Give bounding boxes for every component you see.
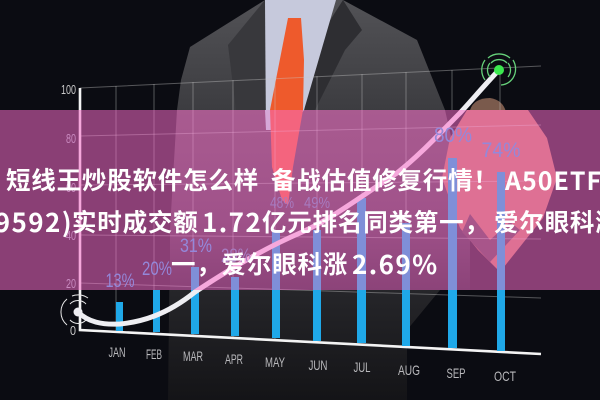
tie seen through band bbox=[270, 110, 303, 205]
y axis labels in band: 40 bbox=[66, 228, 76, 243]
percentage labels: 13% bbox=[106, 271, 135, 292]
bars bbox=[116, 158, 505, 351]
chart grid bbox=[80, 66, 541, 350]
percentage labels: 48% bbox=[270, 195, 294, 212]
month labels: FEB bbox=[146, 346, 162, 362]
y axis labels in band: 60 bbox=[66, 180, 76, 195]
green target marker bbox=[482, 54, 516, 85]
y axis labels: 0 bbox=[70, 323, 76, 338]
month labels: JUL bbox=[354, 359, 371, 375]
month labels: MAR bbox=[183, 348, 203, 364]
start target marker bbox=[61, 295, 88, 325]
month labels: SEP bbox=[446, 365, 466, 381]
y axis labels in band: 80 bbox=[66, 131, 76, 146]
percentage labels: 28% bbox=[221, 246, 251, 267]
month labels: AUG bbox=[398, 362, 420, 378]
growth curve bbox=[78, 72, 497, 324]
businessman figure bbox=[168, 0, 506, 400]
y axis in band bbox=[78, 110, 82, 290]
title line 2 bbox=[0, 203, 600, 240]
grid in band bbox=[80, 110, 541, 298]
title line 2: 1.72 bbox=[202, 203, 262, 240]
hand seen through band bbox=[442, 110, 557, 272]
month labels: MAY bbox=[265, 354, 285, 370]
title line 2: 实时成交额 bbox=[72, 204, 198, 239]
percentage labels: 31% bbox=[180, 236, 212, 257]
title line 1: A50ETF bbox=[505, 162, 600, 198]
axes bbox=[80, 88, 541, 354]
shirt seen through band bbox=[265, 110, 304, 130]
title line 3 bbox=[171, 245, 439, 282]
month labels: OCT bbox=[494, 368, 516, 384]
month labels: JAN bbox=[108, 344, 126, 360]
y axis labels bbox=[61, 82, 76, 338]
title line 3: 一，爱尔眼科涨 bbox=[171, 246, 348, 281]
title line 1 bbox=[6, 162, 600, 198]
percentage labels: 49% bbox=[304, 195, 330, 212]
percentage labels bbox=[106, 124, 520, 292]
y axis labels in band: 20 bbox=[66, 276, 76, 291]
percentage labels: 20% bbox=[142, 259, 172, 280]
month labels: JUN bbox=[308, 357, 328, 373]
y axis labels in band bbox=[66, 131, 76, 291]
percentage labels: 74% bbox=[482, 139, 520, 162]
pink title band bbox=[0, 110, 600, 290]
percentage labels: 80% bbox=[434, 124, 472, 147]
title line 1: 短线王炒股软件怎么样 bbox=[6, 162, 259, 197]
title line 3: 2.69% bbox=[352, 245, 439, 282]
hand shadow folds bbox=[462, 214, 520, 262]
suit seen through band bbox=[170, 110, 470, 290]
curve in band bbox=[194, 110, 466, 290]
y axis labels: 100 bbox=[61, 82, 76, 97]
month labels: APR bbox=[225, 351, 243, 367]
title line 2: 亿元排名同类第一， bbox=[262, 204, 490, 239]
bars in band bbox=[191, 158, 505, 290]
month labels bbox=[108, 344, 516, 384]
title line 1: 备战估值修复行情！ bbox=[271, 162, 499, 197]
